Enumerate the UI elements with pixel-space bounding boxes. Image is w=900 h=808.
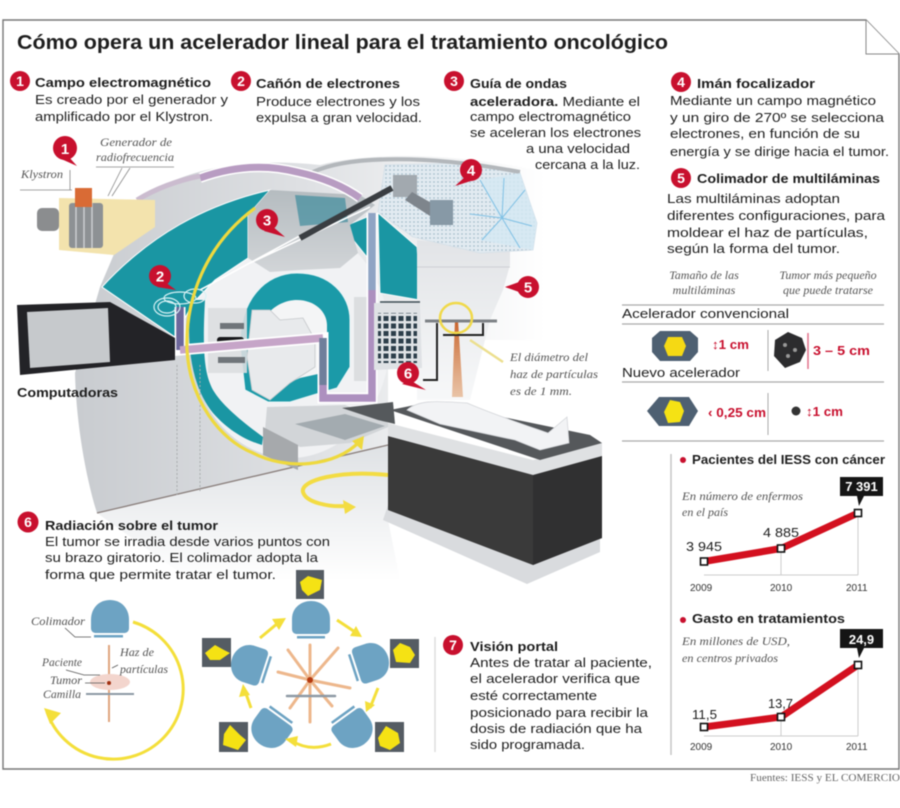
couch control (265, 405, 393, 447)
label: klystron (20, 167, 72, 190)
block 4: 4 (677, 74, 685, 90)
lilac top arc (200, 167, 360, 198)
diagram: single collimator (31, 600, 183, 759)
marker 5 (505, 276, 539, 298)
block 2: Produce electrones y los (256, 94, 421, 109)
teal sector left (102, 190, 270, 337)
label: generador de radiofrecuencia (96, 135, 174, 196)
teal ring (240, 273, 350, 402)
column heads: Tamaño de las (669, 268, 739, 282)
block 2: expulsa a gran velocidad. (256, 110, 422, 125)
monitor (17, 302, 175, 375)
chart: pacientes: 3 945 (686, 540, 722, 554)
block 6 (18, 512, 330, 582)
star magnet (470, 178, 532, 248)
starburst (278, 645, 350, 722)
block 2: Cañón de electrones (256, 76, 400, 91)
diagram: single collimator: Haz de (119, 645, 155, 659)
collimators (226, 601, 394, 755)
table: multilaminas comparison (622, 268, 884, 441)
block 7: Visión portal (470, 639, 558, 654)
chart: pacientes: Pacientes del IESS con cáncer (692, 452, 885, 467)
title: Cómo opera un acelerador lineal para el tratamiento oncológico (17, 32, 668, 54)
block 1: amplificado por el Klystron. (35, 109, 213, 124)
label: computadoras: Computadoras (17, 386, 118, 400)
column heads (669, 268, 877, 297)
gantry block (247, 310, 315, 400)
block 6: forma que permite tratar el tumor. (45, 567, 276, 582)
block 7: posicionado para recibir la (470, 705, 649, 720)
block 5: Las multiláminas adoptan (667, 191, 840, 206)
gray vertical bar (354, 297, 367, 381)
icon: tumor small (792, 406, 800, 416)
diagram: single collimator: Camilla (43, 687, 81, 701)
chart: pacientes: En número de enfermos (681, 489, 803, 503)
electron coil (154, 289, 206, 316)
block 4 (670, 72, 889, 159)
label: diametro (509, 350, 598, 398)
bore (190, 222, 390, 458)
teal crescent (189, 300, 263, 445)
block 5: según la forma del tumor. (667, 241, 840, 256)
marker 5: 5 (524, 280, 532, 296)
block 7: dosis de radiación que ha (470, 721, 643, 736)
block 4: Mediante un campo magnético (670, 93, 876, 108)
chart: gasto: 11,5 (692, 708, 717, 722)
chart: gasto: 24,9 (849, 632, 874, 647)
chart: gasto: Gasto en tratamientos (692, 611, 845, 626)
block 6: su brazo giratorio. El colimador adopta la (45, 550, 319, 565)
yellow arrow gantry (187, 208, 360, 464)
diagonal guide (200, 187, 392, 290)
block 3: a una velocidad (526, 141, 630, 156)
chart: gasto: 2009 (690, 742, 713, 753)
beam (452, 320, 463, 397)
chart: pacientes: 7 391 (845, 479, 878, 494)
klystron (37, 188, 155, 255)
block 4: y un giro de 270º se selecciona (670, 110, 885, 125)
table: multilaminas comparison: ↕1 cm (806, 404, 843, 419)
marker 3: 3 (263, 212, 271, 230)
marker 2: 2 (156, 268, 164, 286)
table: multilaminas comparison: ↕1 cm (712, 337, 749, 352)
arrows (244, 620, 378, 747)
illustration: linear accelerator (17, 156, 602, 584)
block 7: el acelerador verifica que (470, 671, 640, 686)
divider left of block 7 (434, 637, 436, 752)
chart: gasto: 2011 (846, 742, 868, 753)
label: diametro: haz de partículas (510, 367, 598, 381)
label: generador de radiofrecuencia: Generador de (100, 135, 173, 149)
block 6: 6 (24, 514, 32, 530)
chart: gasto: 13,7 (768, 697, 793, 711)
column heads: que puede tratarse (783, 283, 874, 297)
beam diameter loop (440, 303, 503, 362)
block 5: 5 (677, 170, 685, 186)
table: multilaminas comparison: 3 – 5 cm (813, 343, 870, 358)
block 1: 1 (16, 73, 24, 89)
gun assembly box (208, 308, 247, 373)
block 7 (443, 635, 652, 752)
chart: pacientes: en el país (682, 505, 728, 519)
chart: pacientes: 2009 (690, 583, 713, 594)
source: Fuentes: IESS y EL COMERCIO (750, 773, 900, 784)
patient body (407, 402, 569, 450)
charts divider (670, 454, 672, 755)
diagram: single collimator: Tumor (50, 673, 82, 687)
marker 1 (53, 136, 77, 166)
tumor tiles (202, 570, 419, 752)
marker 6 (397, 362, 426, 390)
collimator tray (423, 321, 497, 380)
table: multilaminas comparison: ‹ 0,25 cm (708, 405, 766, 420)
chart: gasto: 2010 (770, 742, 793, 753)
gray hexagon around waveguide (248, 190, 375, 272)
diagram: single collimator: Paciente (41, 655, 83, 669)
waveguide (180, 213, 372, 398)
row: nuevo acelerador: Nuevo acelerador (622, 365, 741, 380)
label: diametro: es de 1 mm. (510, 384, 572, 398)
block 3: campo electromagnético (470, 109, 631, 124)
block 4: Imán focalizador (697, 76, 815, 91)
block 3: aceleradora. Mediante el (470, 94, 640, 109)
column heads: multiláminas (673, 283, 736, 297)
chart: pacientes: 2011 (846, 583, 868, 594)
block 2: 2 (237, 73, 245, 89)
icon: tumor large (774, 332, 806, 368)
chart: pacientes (680, 452, 885, 594)
marker 3 (256, 209, 285, 237)
label: generador de radiofrecuencia: radiofrecuencia (96, 150, 174, 164)
dotted pillars (177, 365, 200, 497)
chart: pacientes: 2010 (770, 583, 793, 594)
mesh focusing magnet (378, 163, 537, 253)
marker 6: 6 (404, 366, 412, 382)
block 5: moldear el haz de partículas, (667, 225, 868, 240)
marker 4: 4 (467, 162, 476, 180)
block 6: El tumor se irradia desde varios puntos con (45, 534, 330, 549)
block 1: Campo electromagnético (35, 75, 211, 90)
block 7: 7 (449, 637, 457, 653)
teal sector right (343, 213, 420, 300)
block 6: Radiación sobre el tumor (45, 518, 218, 533)
block 7: esté correctamente (470, 688, 597, 703)
row: acelerador convencional: Acelerador convencional (622, 306, 789, 321)
marker 2 (149, 265, 176, 290)
markers on illustration (53, 136, 539, 390)
block 3: se aceleran los electrones (470, 125, 642, 140)
block 4: electrones, en función de su (670, 126, 860, 141)
block 1: Es creado por el generador y (35, 92, 229, 107)
block 5: diferentes configuraciones, para (667, 208, 886, 223)
column heads: Tumor más pequeño (779, 268, 877, 282)
diagram: single collimator: partículas (119, 662, 168, 676)
block 3 (444, 71, 642, 172)
gantry disc (75, 156, 545, 513)
chart: gasto: en centros privados (682, 651, 778, 665)
block 7: Antes de tratar al paciente, (470, 655, 652, 670)
block 5: Colimador de multiláminas (697, 171, 880, 186)
marker 1: 1 (61, 141, 69, 158)
block 7: sido programada. (470, 737, 585, 752)
diagram: single collimator: Colimador (31, 614, 85, 628)
icon: leaf pattern 1 (652, 331, 698, 361)
label: diametro: El diámetro del (509, 350, 589, 364)
block 4: energía y se dirige hacia el tumor. (670, 144, 889, 159)
grid (374, 302, 422, 370)
icon: leaf pattern 2 (647, 397, 698, 426)
yellow arrow floor (303, 474, 388, 506)
label: klystron: Klystron (20, 167, 63, 181)
block 2 (231, 71, 422, 125)
chart: pacientes: 4 885 (763, 526, 799, 540)
block 5 (667, 168, 886, 256)
treatment table (383, 402, 602, 584)
chart: gasto (680, 611, 883, 753)
block 3: cercana a la luz. (535, 157, 640, 172)
block 1 (10, 71, 229, 124)
chart: gasto: En millones de USD, (681, 634, 790, 648)
marker 4 (455, 159, 482, 186)
head (417, 240, 510, 400)
diagram: rotation wheel (202, 570, 419, 755)
floor (97, 445, 400, 580)
block 3: 3 (450, 73, 458, 89)
block 3: Guía de ondas (470, 76, 567, 91)
